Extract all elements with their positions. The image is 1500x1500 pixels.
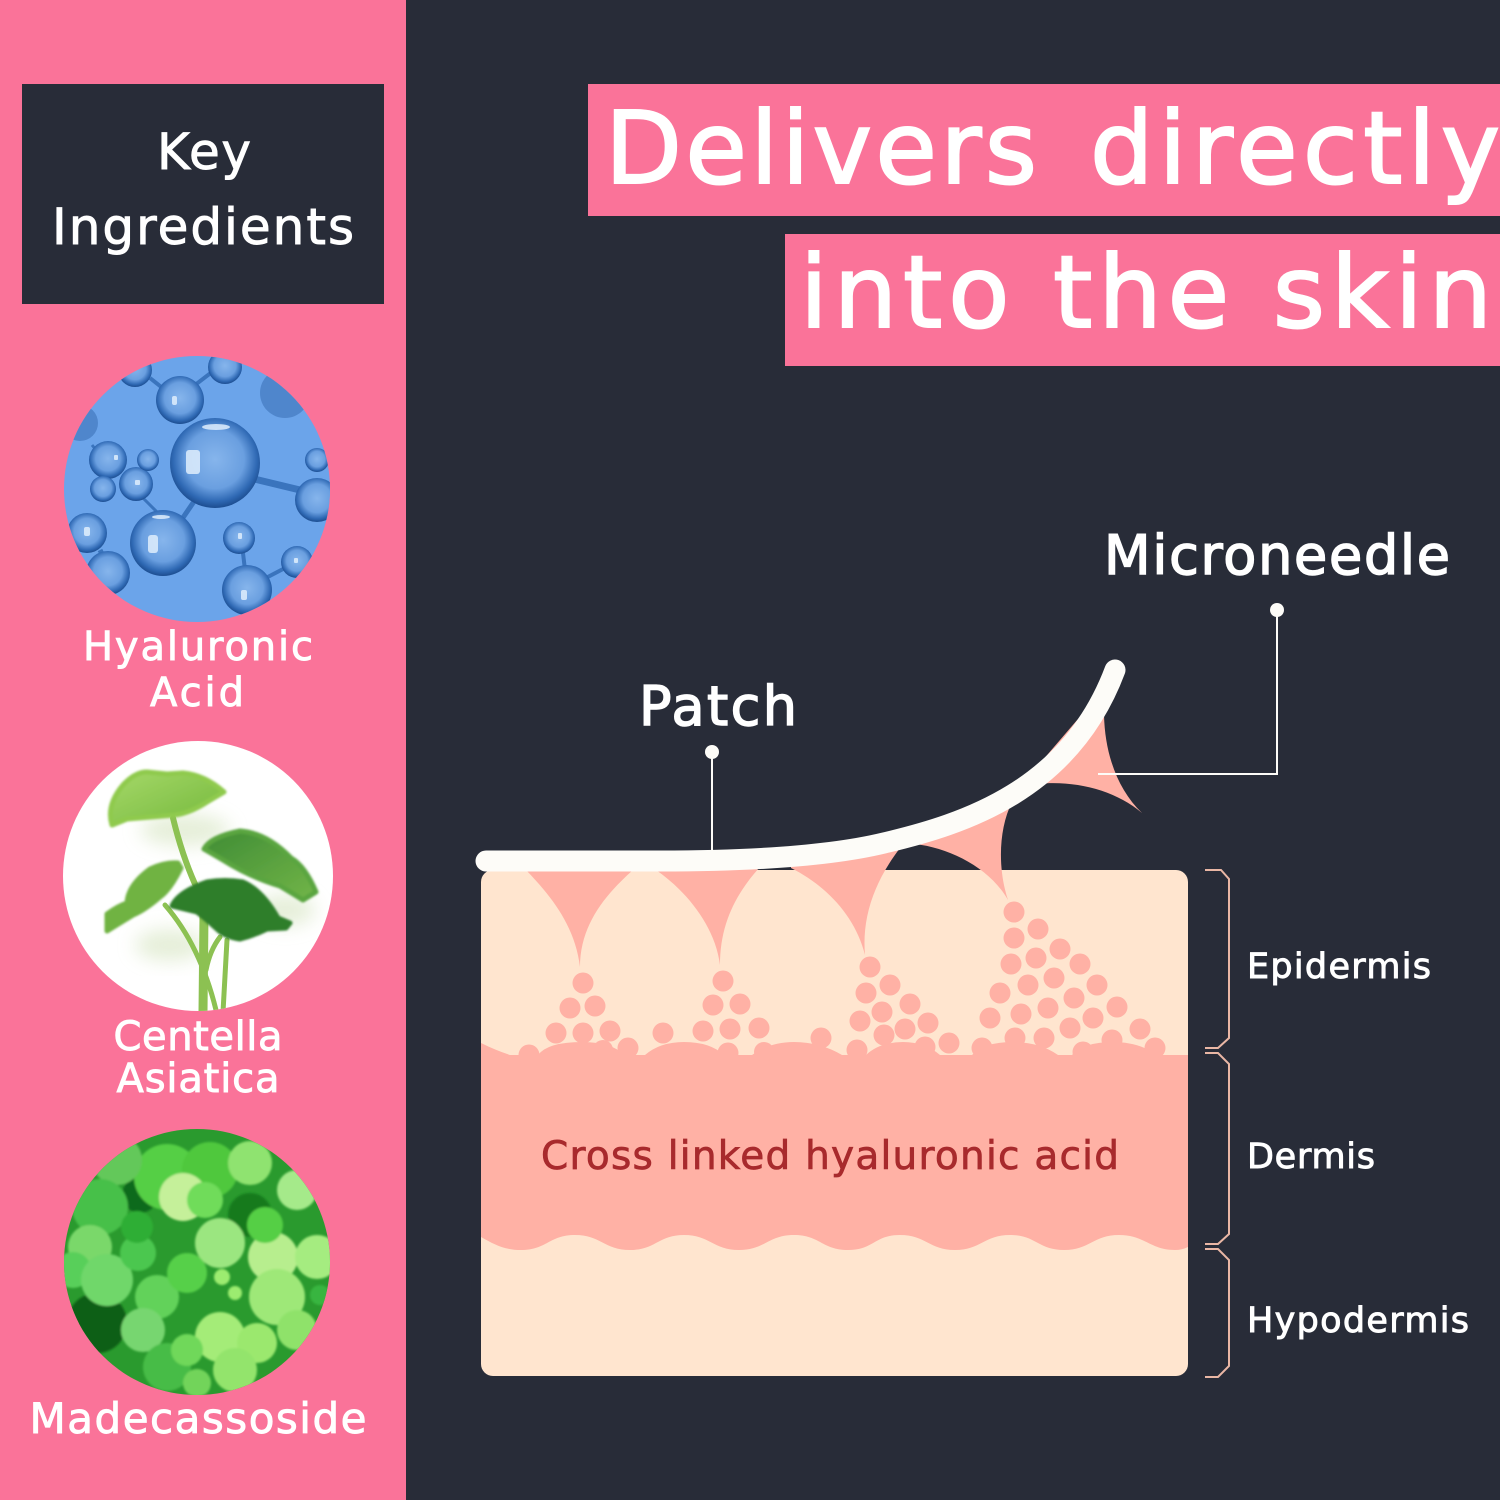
heading: Key Ingredients: Ingredients — [52, 198, 354, 256]
bracket: epidermis: Epidermis — [1247, 947, 1431, 987]
photo: madecassoside green leaves — [55, 1125, 339, 1400]
label: Centella Asiatica: Asiatica — [116, 1056, 280, 1102]
title: Delivers directly into the skin: directly — [1090, 90, 1500, 207]
bracket: dermis — [1205, 1053, 1375, 1244]
callout: Microneedle — [1098, 524, 1450, 774]
callout: Microneedle: Microneedle — [1104, 524, 1450, 587]
callout: Patch: Patch — [639, 675, 797, 738]
photo: centella asiatica plant on white — [60, 738, 336, 1014]
label: Hyaluronic Acid — [83, 624, 313, 716]
photo: hyaluronic acid molecules — [60, 350, 339, 630]
released hyaluronic acid dots — [518, 902, 1166, 1066]
panel: key ingredients sidebar — [0, 0, 406, 1500]
bracket: dermis: Dermis — [1247, 1137, 1375, 1177]
label: Hyaluronic Acid: Acid — [150, 670, 244, 716]
dermis layer — [481, 1042, 1188, 1250]
callout: Patch — [639, 675, 797, 852]
diagram: skin layers with microneedle patch — [481, 670, 1188, 1376]
label: Hyaluronic Acid: Hyaluronic — [83, 624, 313, 670]
label: Centella Asiatica: Centella — [114, 1014, 282, 1060]
label: Centella Asiatica — [114, 1014, 282, 1102]
bracket: hypodermis: Hypodermis — [1247, 1301, 1469, 1341]
title: Delivers directly into the skin — [588, 84, 1500, 366]
heading: Key Ingredients: Key — [157, 123, 251, 181]
title: Delivers directly into the skin: Delivers — [605, 90, 1037, 207]
patch strip — [486, 670, 1115, 861]
microneedles — [526, 705, 1142, 967]
bracket: hypodermis — [1205, 1249, 1469, 1377]
bracket: epidermis — [1205, 870, 1431, 1048]
label: Cross linked hyaluronic acid: Cross linked hyaluronic acid — [541, 1134, 1119, 1179]
skin block — [481, 870, 1188, 1376]
label: Madecassoside: Madecassoside — [30, 1394, 366, 1443]
heading: Key Ingredients — [22, 84, 384, 304]
title: Delivers directly into the skin: into the skin — [800, 234, 1492, 351]
